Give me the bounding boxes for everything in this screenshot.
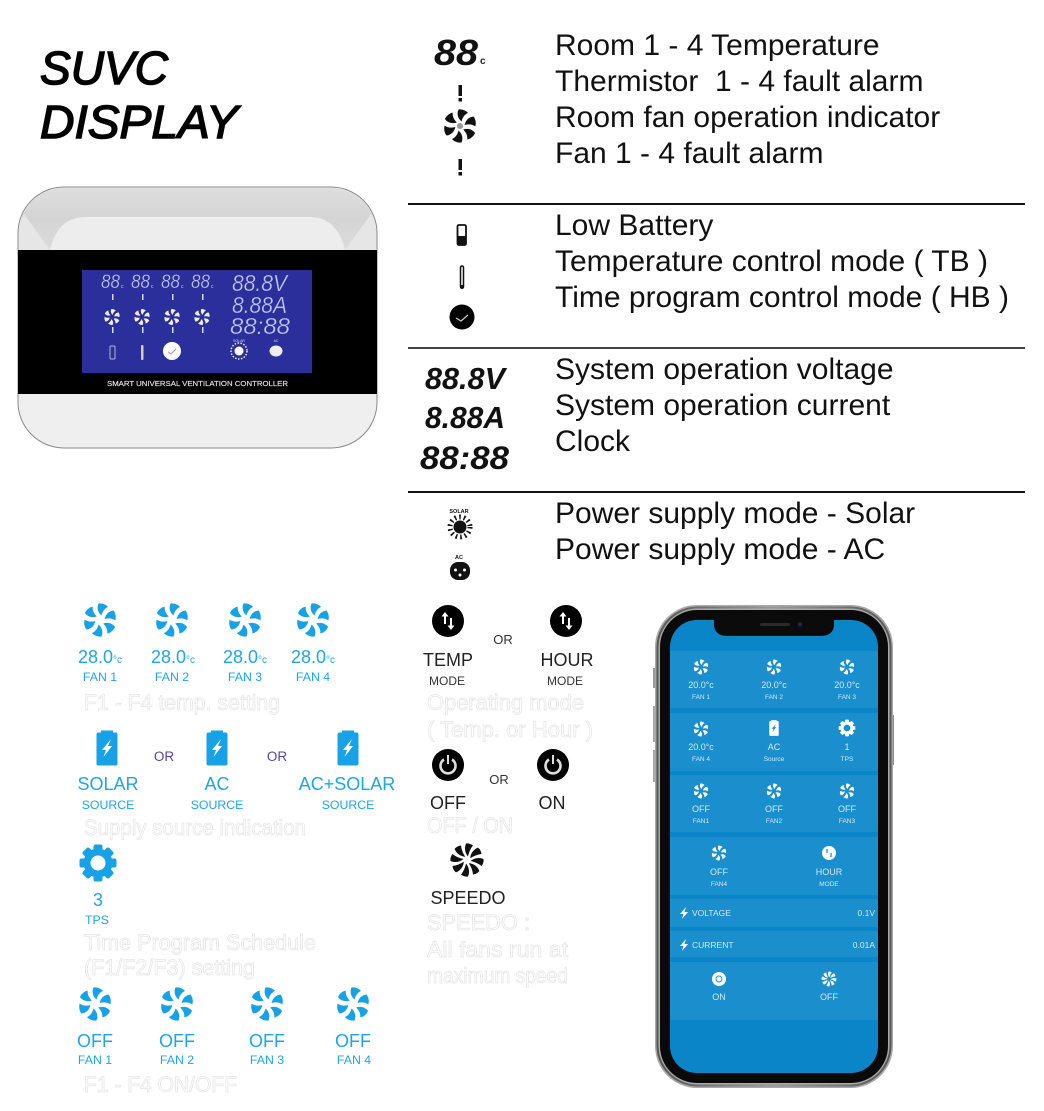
panel: fan temperature setting: °c: [113, 655, 122, 666]
phone row: fan temps: [688, 660, 860, 701]
legend: system readouts: 88:88: [420, 440, 509, 476]
panel: fan temperature setting: FAN 2: [155, 670, 189, 684]
legend: temperature and fan icons: [434, 32, 486, 176]
legend: mode text: [555, 209, 1009, 314]
panel: speedo: maximum speed: [427, 963, 568, 988]
panel: fan temperature setting: °c: [326, 655, 335, 666]
legend: temperature and fans text: Room 1 - 4 Temperature: [555, 29, 880, 62]
panel: fan temperature setting: 28.0: [151, 647, 186, 667]
phone row: fan off: [692, 784, 856, 825]
panel: speedo: SPEEDO: [430, 888, 506, 908]
title: SUVC: [40, 42, 168, 94]
panel: speedo: [427, 843, 568, 988]
legend: system readouts: 8.88A: [425, 400, 505, 435]
title: [40, 42, 241, 148]
LCD screen: 8.88A: [232, 292, 287, 318]
LCD screen: c: [151, 284, 154, 290]
panel: supply source: SOLAR: [77, 774, 139, 794]
controller device: [18, 187, 377, 448]
panel: supply source: SOURCE: [191, 798, 243, 812]
phone row: fan off: OFF: [765, 804, 783, 814]
legend: power text: Power supply mode - Solar: [555, 497, 915, 530]
panel: operating mode: Operating mode: [427, 690, 584, 715]
phone row: fan temps: FAN 2: [765, 694, 783, 701]
phone row: fan off: FAN3: [839, 818, 856, 825]
panel: fan temperature setting: FAN 4: [296, 670, 330, 684]
panel: fan on off: OFF: [249, 1031, 285, 1051]
phone row: voltage: [680, 907, 875, 919]
panel: time program schedule: 3: [93, 890, 103, 910]
phone row: fan temps: 20.0°c: [834, 680, 860, 690]
LCD screen: 88.8V: [232, 270, 289, 296]
legend: temperature and fans text: Fan 1 - 4 fault alarm: [555, 137, 823, 170]
phone row: fan 4, source, TPS: Source: [764, 756, 785, 763]
LCD screen: AC: [274, 339, 279, 343]
LCD screen: 88:88: [230, 313, 290, 339]
panel: supply source: OR: [267, 749, 287, 764]
panel: off on: ON: [538, 793, 566, 813]
panel: fan temperature setting: °c: [258, 655, 267, 666]
phone row: fan 4 and hour mode: HOUR: [816, 867, 843, 877]
panel: supply source: SOURCE: [82, 798, 134, 812]
phone row: on and off: OFF: [820, 992, 838, 1002]
phone row: fan 4 and hour mode: OFF: [710, 867, 728, 877]
legend: system readouts: 88.8V: [425, 361, 507, 396]
panel: off on: OFF / ON: [427, 813, 513, 838]
phone row: fan off: OFF: [692, 804, 710, 814]
panel: fan temperature setting: [78, 603, 335, 715]
LCD screen: c: [121, 284, 124, 290]
panel: fan on off: FAN 1: [78, 1053, 112, 1067]
LCD screen: 88: [101, 272, 120, 293]
phone row: fan off: FAN1: [693, 818, 710, 825]
panel: time program schedule: Time Program Schedule: [84, 930, 316, 955]
phone row: fan 4, source, TPS: 20.0°c: [688, 742, 714, 752]
legend: mode text: Low Battery: [555, 209, 713, 242]
legend: power icons: AC: [455, 555, 463, 561]
legend: temperature and fans text: Room fan operation indicator: [555, 101, 940, 134]
LCD screen: [82, 270, 312, 373]
panel: supply source: AC: [204, 774, 230, 794]
legend: mode text: Time program control mode ( HB ): [555, 281, 1009, 314]
phone row: fan 4 and hour mode: FAN4: [711, 881, 728, 888]
panel: off on: OR: [489, 772, 509, 787]
panel: off on: OFF: [430, 793, 466, 813]
panel: fan temperature setting: 28.0: [78, 647, 113, 667]
panel: fan on off: [77, 987, 371, 1097]
legend: temperature and fans text: [555, 29, 940, 170]
panel: speedo: All fans run at: [427, 937, 568, 962]
panel: time program schedule: (F1/F2/F3) setting: [84, 955, 255, 980]
phone row: fan 4, source, TPS: [688, 720, 855, 763]
phone row: fan off: OFF: [838, 804, 856, 814]
panel: fan temperature setting: FAN 1: [83, 670, 117, 684]
panel: supply source: SOURCE: [322, 798, 374, 812]
legend: mode icons: [450, 225, 474, 330]
panel: off on: [427, 749, 569, 838]
panel: operating mode: MODE: [429, 674, 465, 688]
panel: time program schedule: [80, 844, 316, 980]
panel: fan temperature setting: 28.0: [223, 647, 258, 667]
legend: temperature and fan icons: c: [480, 56, 486, 67]
legend: system text: System operation voltage: [555, 353, 894, 386]
LCD screen: 88: [191, 272, 210, 293]
panel: fan on off: FAN 2: [160, 1053, 194, 1067]
panel: operating mode: ( Temp. or Hour ): [427, 717, 593, 742]
panel: supply source: [77, 730, 395, 840]
panel: operating mode: TEMP: [423, 650, 473, 670]
legend: power text: Power supply mode - AC: [555, 533, 885, 566]
LCD screen: c: [181, 284, 184, 290]
panel: operating mode: MODE: [547, 674, 583, 688]
title: DISPLAY: [40, 96, 241, 148]
phone row: current: 0.01A: [853, 940, 875, 950]
panel: operating mode: HOUR: [540, 650, 594, 670]
legend: system text: [555, 353, 894, 458]
phone row: voltage: 0.1V: [858, 908, 875, 918]
legend: system readouts: [420, 361, 509, 476]
panel: speedo: SPEEDO :: [427, 910, 530, 935]
legend: system text: System operation current: [555, 389, 891, 422]
panel: fan temperature setting: °c: [186, 655, 195, 666]
panel: fan on off: FAN 3: [250, 1053, 284, 1067]
legend: temperature and fan icons: 88: [434, 32, 478, 73]
panel: time program schedule: TPS: [85, 913, 109, 927]
LCD screen: SOLAR: [233, 339, 245, 343]
phone row: fan temps: 20.0°c: [688, 680, 714, 690]
panel: fan on off: F1 - F4 ON/OFF: [84, 1072, 237, 1097]
legend: power icons: SOLAR: [449, 509, 469, 515]
phone row: fan temps: FAN 1: [692, 694, 710, 701]
legend: temperature and fans text: Thermistor 1 - 4 fault alarm: [555, 65, 923, 98]
legend: system text: Clock: [555, 425, 631, 458]
phone row: fan off: FAN2: [766, 818, 783, 825]
phone row: fan 4, source, TPS: AC: [768, 742, 781, 752]
panel: fan on off: OFF: [77, 1031, 113, 1051]
panel: fan temperature setting: 28.0: [291, 647, 326, 667]
panel: supply source: Supply source indication: [84, 815, 306, 840]
controller label: SMART UNIVERSAL VENTILATION CONTROLLER: [107, 379, 288, 388]
phone row: current: CURRENT: [692, 940, 734, 950]
phone app screen: [653, 605, 894, 1088]
LCD screen: 88: [161, 272, 180, 293]
panel: fan on off: FAN 4: [337, 1053, 371, 1067]
phone row: fan 4, source, TPS: FAN 4: [692, 756, 710, 763]
legend: power icons: [449, 509, 470, 580]
panel: fan temperature setting: F1 - F4 temp. setting: [84, 690, 280, 715]
panel: fan temperature setting: FAN 3: [228, 670, 262, 684]
phone row: fan 4 and hour mode: MODE: [819, 881, 839, 888]
phone row: fan 4, source, TPS: 1: [844, 742, 850, 752]
phone row: voltage: VOLTAGE: [692, 908, 731, 918]
panel: fan on off: OFF: [335, 1031, 371, 1051]
LCD screen: c: [211, 284, 214, 290]
panel: supply source: OR: [154, 749, 174, 764]
phone row: on and off: ON: [712, 992, 726, 1002]
phone row: fan 4 and hour mode: [710, 846, 843, 888]
panel: supply source: AC+SOLAR: [299, 774, 395, 794]
phone row: on and off: [712, 972, 838, 1002]
panel: fan on off: OFF: [159, 1031, 195, 1051]
panel: operating mode: [423, 605, 594, 742]
phone row: fan temps: FAN 3: [838, 694, 856, 701]
LCD screen: 88: [131, 272, 150, 293]
phone row: current: [680, 939, 875, 951]
phone row: fan temps: 20.0°c: [761, 680, 787, 690]
phone rows: [670, 651, 878, 1020]
phone row: fan 4, source, TPS: TPS: [841, 756, 854, 763]
legend: power text: [555, 497, 915, 566]
legend: mode text: Temperature control mode ( TB ): [555, 245, 988, 278]
panel: operating mode: OR: [493, 632, 513, 647]
